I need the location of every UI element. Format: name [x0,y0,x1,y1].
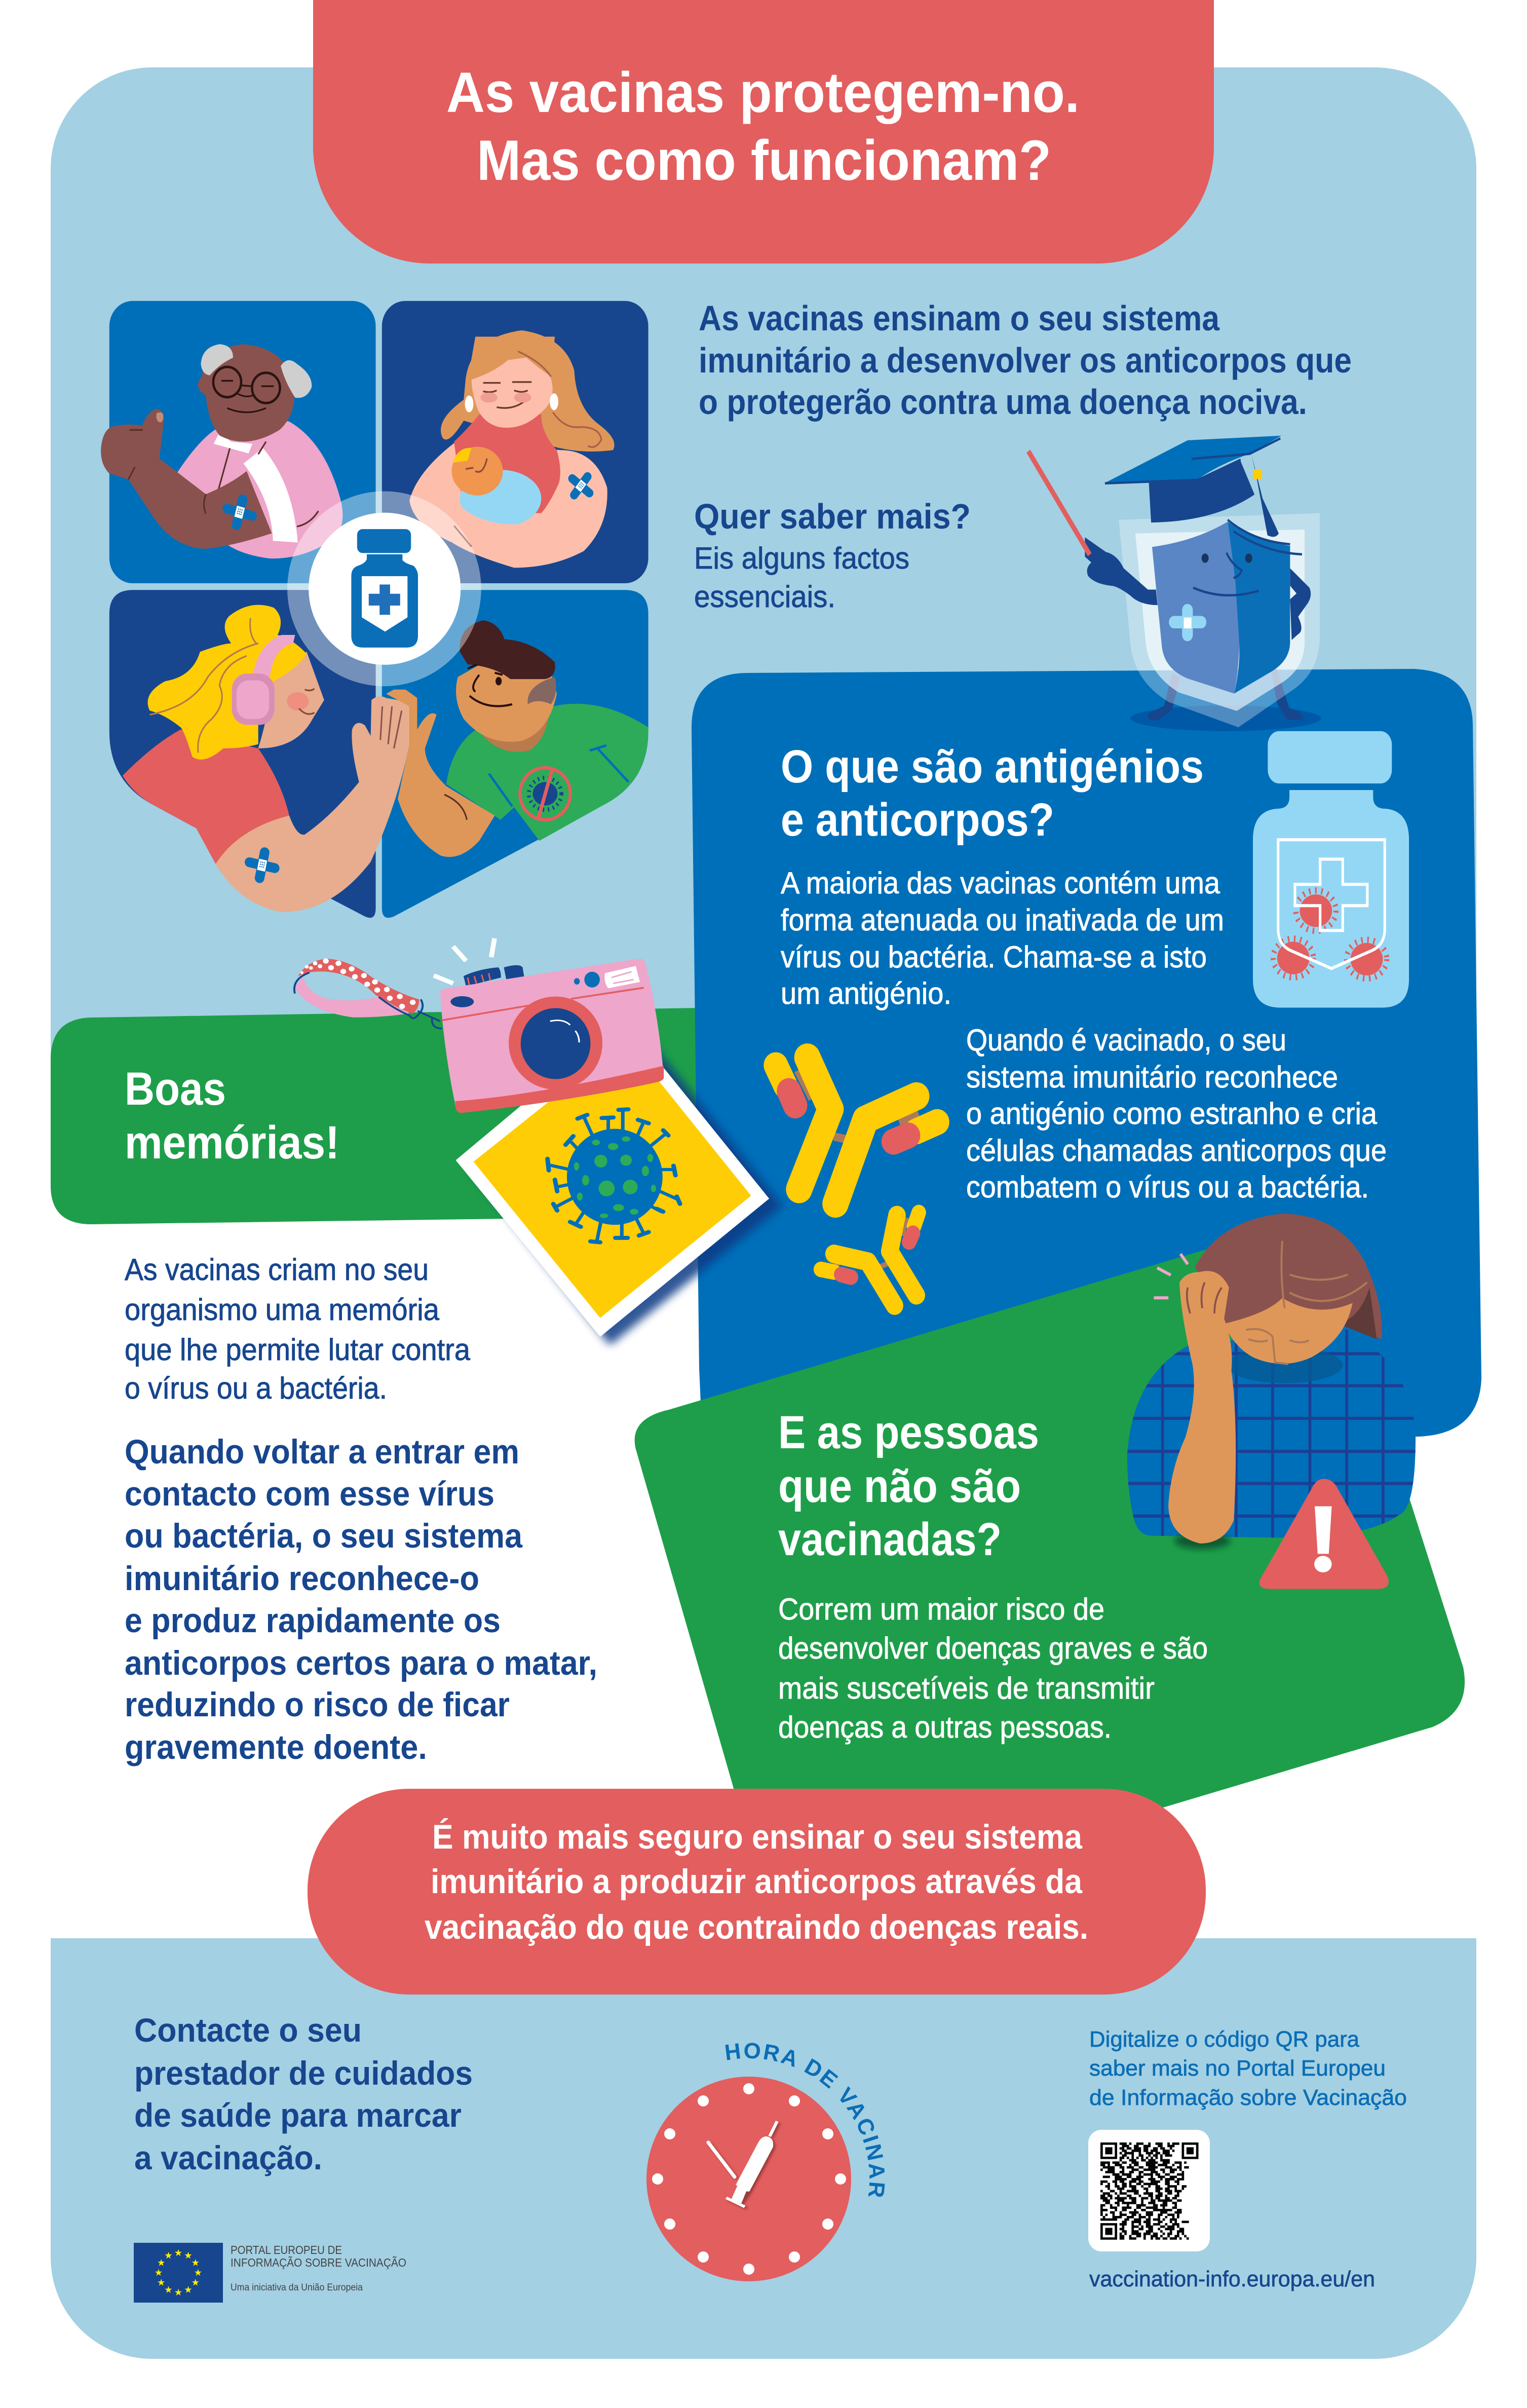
heading: antigens and antibodies [781,741,1204,846]
shirt [1122,1324,1418,1541]
hair [1195,1214,1382,1339]
heading: unvaccinated people: que não são [778,1460,1021,1512]
title [446,61,1080,192]
heading: unvaccinated people: vacinadas? [778,1514,1002,1565]
panel: bottom left tile [109,590,376,918]
graduation cap [1105,436,1281,537]
title: As vacinas protegem-no. [446,61,1080,124]
text: what vaccines contain: forma atenuada ou inativada de um [781,903,1224,937]
text: bold immune response paragraph: reduzindo o risco de ficar [125,1685,510,1724]
text: scan QR code: saber mais no Portal Europeu [1089,2056,1386,2081]
shield halo [1119,513,1320,727]
panel: unvaccinated people green [635,1239,1465,1898]
illustration: polaroid photo of virus [294,938,783,1345]
text: when vaccinated [966,1023,1387,1204]
photo frame [456,1019,769,1337]
title: Mas como funcionam? [477,129,1051,192]
text: scan QR code [1089,2027,1407,2110]
illustration: four vaccinated people in a shield [101,301,648,918]
icon: vial [351,529,418,648]
curved label: HORA DE VACINAR [726,2043,885,2197]
photo shadow [469,1026,783,1345]
face [1193,520,1302,595]
figure: mother with baby [409,330,615,568]
text: when vaccinated: combatem o vírus ou a bactéria. [966,1170,1369,1204]
panel: antigens and antibodies blue [692,669,1481,1437]
callout: safer to vaccinate: vacinação do que contraindo doenças reais. [425,1908,1088,1946]
pointer [1028,451,1090,555]
figure: older man thumbs up [101,344,342,558]
text: want to know more: Eis alguns factos [694,541,909,575]
center vaccine badge [287,491,481,686]
text: contact your provider: a vacinação. [134,2139,322,2176]
text: bold immune response paragraph [125,1433,597,1766]
text: vaccines create memory [125,1253,471,1405]
icon: plaster [1169,604,1206,641]
intro text: imunitário a desenvolver os anticorpos que [699,341,1352,380]
photo yellow area [474,1040,751,1318]
shield outline [1278,840,1385,968]
text: unvaccinated risk: Correm um maior risco de [778,1592,1104,1626]
legs [1148,669,1304,721]
text: bold immune response paragraph: gravemente doente. [125,1728,427,1766]
text: when vaccinated: o antigénio como estranho e cria [966,1097,1378,1131]
background: upper light blue panel [51,67,1476,1064]
intro text: As vacinas ensinam o seu sistema [699,298,1220,338]
text: bold immune response paragraph: Quando voltar a entrar em [125,1433,519,1471]
icon: flash rays [434,938,494,984]
antibody small [821,1213,919,1306]
heading: antigens and antibodies: e anticorpos? [781,794,1054,846]
arm and hand [1168,1271,1236,1544]
heading: unvaccinated people: E as pessoas [778,1407,1039,1458]
right arm on hip [1290,568,1311,640]
panel: title banner [313,0,1214,264]
text: contact your provider [134,2011,473,2176]
heading: boas memorias: memórias! [125,1117,339,1169]
text: when vaccinated: Quando é vacinado, o seu [966,1023,1286,1057]
cross outline [1295,859,1367,930]
logo: European Vaccination Information Portal: Uma iniciativa da União Europeia [231,2282,363,2293]
panel: top left tile [109,301,376,583]
text: bold immune response paragraph: ou bactéria, o seu sistema [125,1517,523,1555]
text: scan QR code: de Informação sobre Vacinação [1089,2085,1407,2110]
logo: European Vaccination Information Portal [134,2243,406,2303]
callout: safer to vaccinate [308,1789,1206,1995]
text: bold immune response paragraph: imunitário reconhece-o [125,1559,479,1598]
intro text: o protegerão contra uma doença nociva. [699,382,1307,422]
text: what vaccines contain [781,866,1224,1010]
icon: camera [440,959,664,1113]
text: contact your provider: Contacte o seu [134,2011,362,2049]
illustration: unwell woman with warning sign [1122,1214,1418,1589]
text: contact your provider: de saúde para marcar [134,2096,462,2134]
text: vaccines create memory: organismo uma memória [125,1293,440,1327]
text: want to know more: essenciais. [694,580,835,614]
panel: boas memorias green band [51,1008,699,1224]
icon: camera strap [294,958,442,1029]
arm shadow [1174,1532,1231,1549]
pointing arm [1085,537,1158,605]
heading: unvaccinated people [778,1407,1039,1565]
icon: vaccination clock [646,2043,885,2281]
text: unvaccinated risk [778,1592,1208,1744]
figure: woman with headphones high five [123,605,409,912]
text: scan QR code: Digitalize o código QR para [1089,2027,1360,2052]
QR code [1088,2130,1210,2251]
text: website URL: vaccination-info.europa.eu/en [1089,2267,1375,2291]
text: unvaccinated risk: desenvolver doenças graves e são [778,1631,1208,1665]
antibody large [776,1058,937,1204]
pain marks [1154,1254,1188,1298]
heading: antigens and antibodies: O que são antigénios [781,741,1204,793]
clock hand shadow [710,2123,779,2208]
icon: crossed virus badge [520,768,570,820]
illustration: antibodies [776,1058,937,1306]
text: vaccines create memory: o vírus ou a bactéria. [125,1371,387,1405]
panel: top right tile [382,301,648,583]
text: bold immune response paragraph: anticorpos certos para o matar, [125,1644,597,1682]
heading: boas memorias: Boas [125,1063,226,1115]
text: contact your provider: prestador de cuidados [134,2054,473,2092]
text: when vaccinated: sistema imunitário reconhece [966,1060,1338,1094]
text: want to know more [694,497,971,614]
text: unvaccinated risk: mais suscetíveis de transmitir [778,1671,1155,1705]
text: vaccines create memory: que lhe permite lutar contra [125,1333,471,1367]
logo: European Vaccination Information Portal: INFORMAÇÃO SOBRE VACINAÇÃO [231,2256,406,2269]
clock dots [652,2083,846,2275]
logo: European Vaccination Information Portal: PORTAL EUROPEU DE [231,2243,342,2256]
viruses [1273,890,1387,979]
illustration: shield mascot teacher [1028,436,1321,731]
panel: bottom right tile [382,590,648,918]
heading: boas memorias [125,1063,339,1169]
text: unvaccinated risk: doenças a outras pessoas. [778,1710,1112,1744]
clock short hand [708,2142,735,2177]
face [1224,1298,1353,1364]
text: bold immune response paragraph: contacto com esse vírus [125,1475,494,1513]
text: bold immune response paragraph: e produz rapidamente os [125,1601,501,1640]
icon: EU flag [134,2243,223,2303]
syringe hand [726,2121,777,2207]
callout: safer to vaccinate: É muito mais seguro ensinar o seu sistema [432,1818,1083,1856]
intro text [699,298,1352,422]
text: what vaccines contain: vírus ou bactéria. Chama-se a isto [781,940,1207,974]
text: what vaccines contain: um antigénio. [781,976,951,1010]
shield body [1152,522,1239,694]
illustration: vaccine vial with viruses [1253,731,1409,1008]
text: when vaccinated: células chamadas anticorpos que [966,1134,1387,1168]
panel: footer light blue [51,1938,1476,2359]
icon: virus [548,1109,680,1242]
callout: safer to vaccinate: imunitário a produzir anticorpos através da [431,1862,1083,1901]
text: vaccines create memory: As vacinas criam no seu [125,1253,429,1287]
text: what vaccines contain: A maioria das vacinas contém uma [781,866,1220,900]
text: want to know more: Quer saber mais? [694,497,971,536]
icon: warning triangle [1259,1479,1389,1589]
shadow [1130,705,1321,731]
figure: man high five with virus shirt [386,620,648,857]
